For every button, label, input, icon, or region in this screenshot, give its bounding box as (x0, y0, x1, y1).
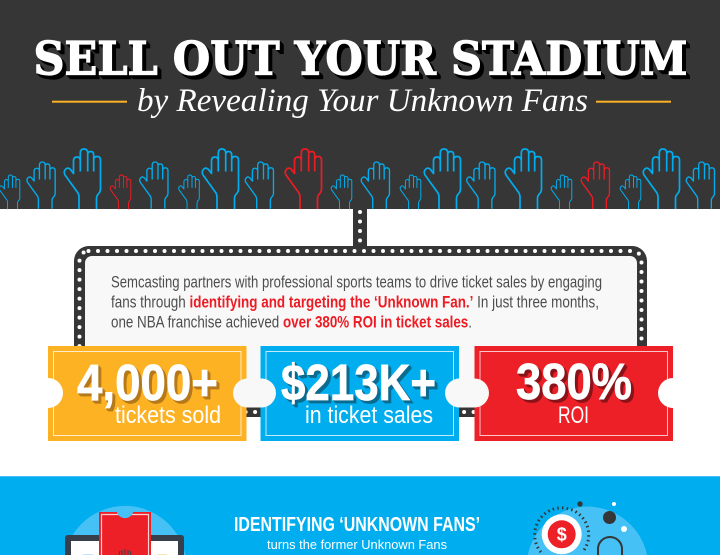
marquee intro panel (74, 208, 647, 417)
ticket: ticket sales (260, 346, 459, 441)
stat number: 4,000+ (77, 354, 218, 411)
blue section (0, 476, 720, 555)
section heading: IDENTIFYING ‘UNKNOWN FANS’ (234, 513, 480, 536)
section subheading: turns the former Unknown Fans (267, 537, 447, 552)
ticket: tickets sold (48, 346, 246, 441)
connector post (353, 208, 367, 248)
icon: ticket on monitor (65, 506, 185, 555)
stat label: ROI (558, 402, 589, 429)
subtitle rule left (52, 101, 127, 103)
intro paragraph: fans through identifying and targeting the ‘Unknown Fan.’ In just three months, (111, 292, 599, 312)
ticket notches (48, 378, 673, 408)
ticket: ROI (474, 346, 673, 441)
intro paragraph: one NBA franchise achieved over 380% ROI in ticket sales. (111, 312, 472, 332)
stat label: in ticket sales (305, 402, 433, 429)
stat label: tickets sold (115, 402, 221, 429)
icon: fan with dollar coin (528, 501, 647, 555)
header panel (0, 0, 720, 209)
subtitle rule right (596, 101, 671, 103)
crowd of raised hands (0, 149, 714, 209)
intro paragraph (111, 272, 602, 332)
stat number: $213K+ (281, 354, 436, 411)
title: SELL OUT YOUR STADIUM (34, 32, 688, 86)
stat number: 380% (516, 353, 632, 410)
subtitle: by Revealing Your Unknown Fans (137, 83, 588, 119)
icon: fan with dollar coin: $ (557, 524, 567, 544)
